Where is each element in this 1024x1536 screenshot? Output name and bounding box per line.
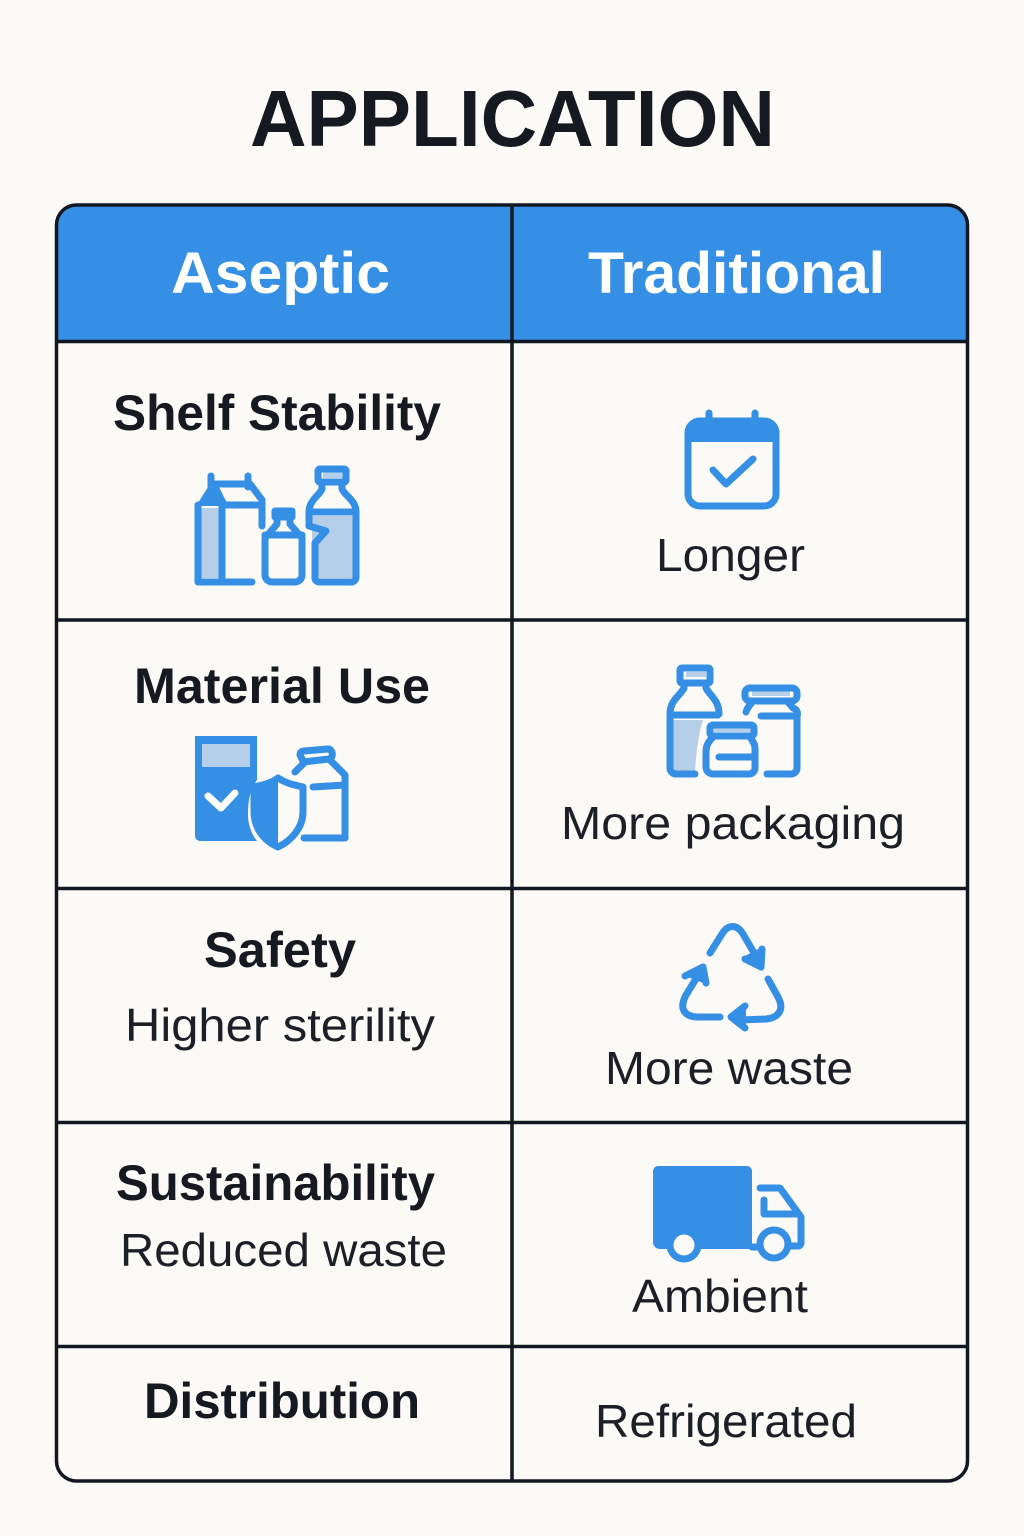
row: material use — [134, 658, 430, 847]
header: Aseptic: Aseptic — [171, 241, 390, 306]
icon: delivery truck — [653, 1166, 801, 1259]
label: Sustainability: Sustainability — [116, 1155, 435, 1211]
label: Material Use: Material Use — [134, 658, 430, 714]
value: Longer: Longer — [656, 529, 805, 581]
title: APPLICATION — [250, 74, 775, 163]
comparison table — [56, 205, 968, 1481]
icon: assorted bottles — [670, 668, 797, 774]
icon: carton, shield and bottle — [195, 736, 345, 847]
value: Ambient: Ambient — [632, 1270, 808, 1322]
row: safety traditional — [605, 926, 853, 1094]
row: shelf stability — [113, 385, 441, 582]
icon: carton and bottles — [196, 469, 356, 582]
value: More waste: More waste — [605, 1042, 853, 1094]
label: Shelf Stability: Shelf Stability — [113, 385, 441, 441]
row: material use traditional — [561, 668, 905, 849]
table grid — [56, 205, 968, 1481]
icon: calendar with check — [686, 413, 778, 506]
icon: recycle arrows — [683, 926, 781, 1029]
row: sustainability traditional — [632, 1166, 808, 1322]
row: safety — [125, 922, 435, 1051]
value: Refrigerated: Refrigerated — [595, 1395, 857, 1447]
header: Traditional: Traditional — [588, 241, 885, 306]
value: Reduced waste: Reduced waste — [120, 1224, 447, 1276]
label: Safety: Safety — [204, 922, 356, 978]
value: More packaging: More packaging — [561, 797, 905, 849]
row: shelf stability traditional — [656, 413, 805, 581]
table header — [57, 206, 968, 341]
value: Higher sterility: Higher sterility — [125, 999, 435, 1051]
row: sustainability — [116, 1155, 447, 1276]
label: Distribution: Distribution — [144, 1373, 420, 1429]
